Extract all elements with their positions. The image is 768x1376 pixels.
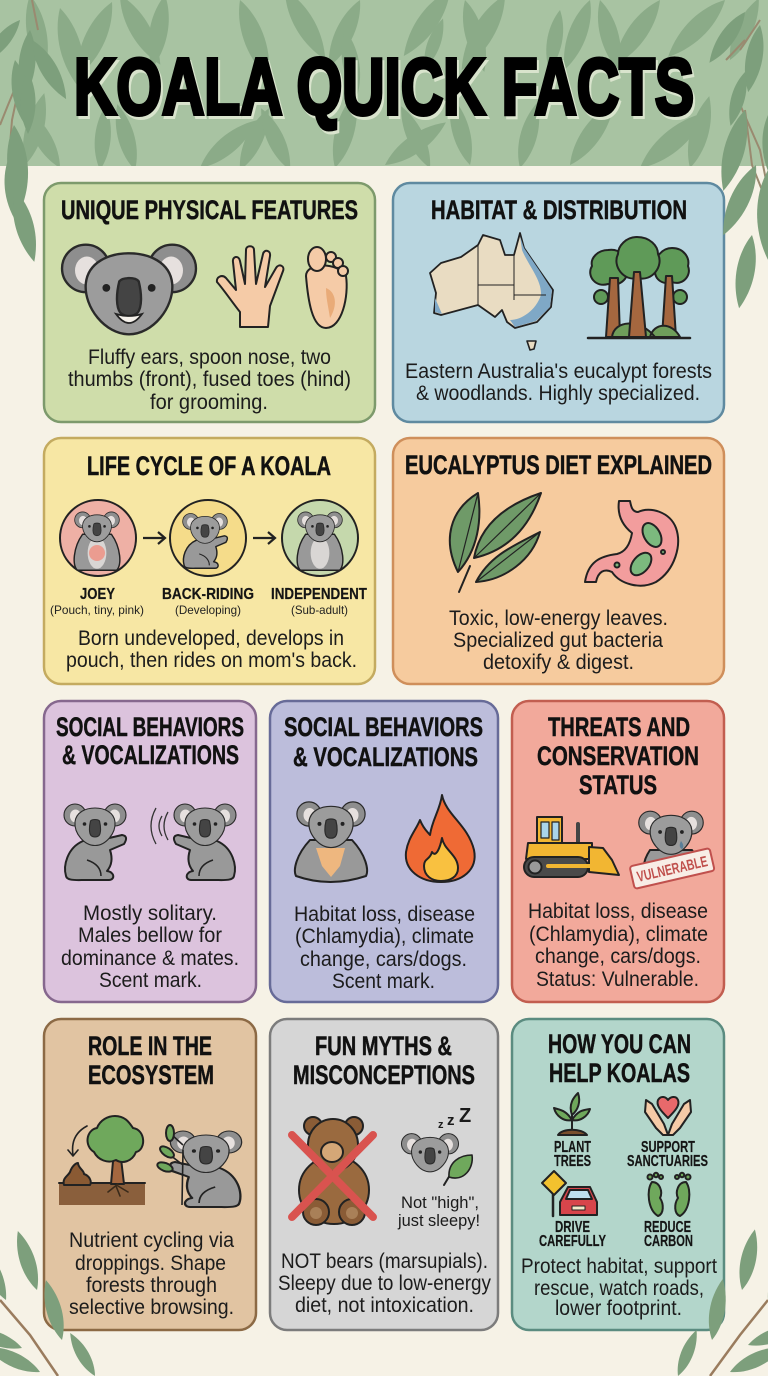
panel: social behaviors and vocalizations (purple): [44, 701, 256, 1002]
label: support sanctuaries: SUPPORT: [641, 1139, 695, 1156]
heading: & VOCALIZATIONS: [293, 742, 478, 772]
body text: change, cars/dogs.: [535, 945, 701, 968]
icon: sleepy koala with zzz: z: [447, 1112, 454, 1129]
icon: koala with chest scent patch: [295, 802, 367, 882]
icon: two koalas with bellow sound waves: [64, 804, 236, 880]
icon: green footprints: [648, 1173, 690, 1216]
body text: Born undeveloped, develops in: [78, 627, 344, 650]
body text: Nutrient cycling via: [69, 1229, 234, 1252]
icon: back-riding stage: [170, 500, 246, 576]
panel: threats and conservation status: [512, 701, 724, 1002]
heading: habitat and distribution: HABITAT & DISTRIBUTION: [431, 195, 687, 225]
heading: HOW YOU CAN: [548, 1029, 691, 1059]
heading: [293, 1031, 475, 1090]
icon: sleepy koala with zzz: Z: [459, 1105, 471, 1127]
body text: [521, 1255, 717, 1320]
body text: [528, 900, 708, 991]
heading: [537, 712, 699, 800]
body text: dominance & mates.: [61, 947, 239, 970]
label: support sanctuaries: [627, 1139, 708, 1170]
icon: hand with two thumbs: [217, 246, 283, 327]
icon: flame: [406, 795, 475, 882]
stamp: vulnerable: VULNERABLE: [635, 853, 709, 886]
heading: ECOSYSTEM: [88, 1060, 214, 1090]
heading: life cycle: LIFE CYCLE OF A KOALA: [87, 451, 331, 481]
panel: life cycle of a koala: [44, 438, 375, 684]
body text: Protect habitat, support: [521, 1255, 717, 1278]
stage sublabels: (Developing): [175, 603, 241, 617]
body text: [61, 902, 239, 992]
body text: Fluffy ears, spoon nose, two: [88, 346, 331, 369]
body text: Scent mark.: [332, 970, 435, 993]
label: support sanctuaries: SANCTUARIES: [627, 1153, 708, 1170]
icon: joey stage: [60, 500, 136, 576]
panel: how you can help koalas: [512, 1019, 724, 1330]
caption: just sleepy!: [397, 1211, 480, 1230]
icon: sleepy koala with zzz: [401, 1105, 471, 1172]
body text: lower footprint.: [555, 1297, 682, 1320]
icon: road sign and car: [542, 1171, 597, 1216]
icon: eucalyptus leaves: [450, 493, 541, 592]
body text: [294, 903, 475, 993]
heading: MISCONCEPTIONS: [293, 1060, 475, 1090]
heading: CONSERVATION: [537, 741, 699, 771]
stage label: independent: INDEPENDENT: [271, 586, 367, 603]
label: plant trees: [554, 1139, 591, 1170]
body text: selective browsing.: [69, 1296, 234, 1319]
panel: eucalyptus diet explained: [393, 438, 724, 684]
top corner hanging eucalyptus leaves: [0, 8, 768, 310]
panel: habitat and distribution: [393, 183, 724, 422]
body text: Mostly solitary.: [83, 902, 217, 925]
body text: NOT bears (marsupials).: [281, 1250, 488, 1273]
heading: [88, 1031, 214, 1090]
body text: [278, 1250, 491, 1317]
label: drive carefully: [539, 1219, 606, 1250]
icon: sprout: [554, 1093, 590, 1135]
body text: [449, 607, 668, 674]
icon: sleepy koala with zzz: z: [438, 1119, 444, 1131]
icon: stomach with gut bacteria: [585, 501, 678, 586]
panel: fun myths and misconceptions: [270, 1019, 498, 1330]
body text: Status: Vulnerable.: [536, 968, 699, 991]
heading: SOCIAL BEHAVIORS: [284, 712, 483, 742]
body text: [66, 627, 357, 672]
body text: rescue, watch roads,: [534, 1277, 704, 1300]
body text: forests through: [86, 1274, 217, 1297]
body text: Males bellow for: [78, 924, 222, 947]
stamp: vulnerable: [630, 848, 715, 889]
body text: & woodlands. Highly specialized.: [416, 382, 700, 405]
icon: koala browsing leaves: [156, 1125, 242, 1207]
body text: Sleepy due to low-energy: [278, 1272, 491, 1295]
body text: droppings. Shape: [75, 1252, 226, 1275]
body text: for grooming.: [150, 391, 268, 414]
body text: pouch, then rides on mom's back.: [66, 649, 357, 672]
icon: crossed-out bear: [292, 1117, 373, 1225]
icon: koala hind foot: [306, 247, 348, 328]
body text: Eastern Australia's eucalypt forests: [405, 360, 712, 383]
bottom corner eucalyptus sprigs: [0, 1228, 768, 1376]
panel: unique physical features: [44, 183, 375, 422]
heading: [284, 712, 483, 772]
label: reduce carbon: REDUCE: [644, 1219, 691, 1236]
stage sublabels: (Pouch, tiny, pink): [50, 603, 144, 617]
heading: STATUS: [579, 770, 657, 800]
body text: [69, 1229, 234, 1319]
body text: (Chlamydia), climate: [529, 923, 708, 946]
body text: Habitat loss, disease: [528, 900, 708, 923]
label: drive carefully: CAREFULLY: [539, 1233, 606, 1250]
heading: [548, 1029, 691, 1088]
icon: independent stage: [282, 500, 358, 576]
panel: social behaviors and vocalizations (blue): [270, 701, 498, 1002]
heading: [56, 712, 244, 770]
body text: Habitat loss, disease: [294, 903, 475, 926]
stage label: joey: JOEY: [80, 586, 116, 603]
body text: Toxic, low-energy leaves.: [449, 607, 668, 630]
header banner with eucalyptus leaves: [0, 0, 768, 190]
body text: Specialized gut bacteria: [453, 629, 663, 652]
body text: thumbs (front), fused toes (hind): [68, 368, 351, 391]
icon: sad koala: [639, 811, 703, 866]
heading: THREATS AND: [548, 712, 690, 742]
label: reduce carbon: [644, 1219, 693, 1250]
body text: detoxify & digest.: [483, 651, 634, 674]
body text: [68, 346, 351, 414]
label: drive carefully: DRIVE: [555, 1219, 590, 1236]
stage label: back-riding: BACK-RIDING: [162, 586, 254, 603]
arrow: [143, 532, 165, 544]
icon: nutrient cycle with tree and droppings: [59, 1116, 145, 1205]
icon: eucalypt forest: [588, 237, 690, 338]
stage sublabels: (Sub-adult): [291, 603, 348, 617]
body text: diet, not intoxication.: [295, 1294, 474, 1317]
heading: & VOCALIZATIONS: [62, 740, 239, 770]
icon: bulldozer: [524, 817, 619, 877]
body text: change, cars/dogs.: [300, 948, 467, 971]
heading: SOCIAL BEHAVIORS: [56, 712, 244, 742]
stage sublabels: [50, 603, 348, 617]
caption: Not "high",: [401, 1193, 479, 1212]
icon: koala face: [62, 245, 196, 334]
body text: (Chlamydia), climate: [295, 925, 474, 948]
label: reduce carbon: CARBON: [644, 1233, 693, 1250]
heading: unique physical features: UNIQUE PHYSICAL FEATURES: [61, 195, 358, 225]
icon: leaf: [444, 1155, 472, 1185]
icon: hands holding heart: [645, 1097, 691, 1135]
panel: role in the ecosystem: [44, 1019, 256, 1330]
body text: Scent mark.: [99, 969, 202, 992]
heading: ROLE IN THE: [88, 1031, 212, 1061]
label: plant trees: PLANT: [554, 1139, 591, 1156]
heading: FUN MYTHS &: [315, 1031, 452, 1061]
body text: [405, 360, 712, 405]
caption: [397, 1193, 480, 1230]
heading: HELP KOALAS: [549, 1058, 690, 1088]
icon: map of Australia: [430, 233, 553, 350]
label: plant trees: TREES: [554, 1153, 591, 1170]
arrow: [253, 532, 275, 544]
